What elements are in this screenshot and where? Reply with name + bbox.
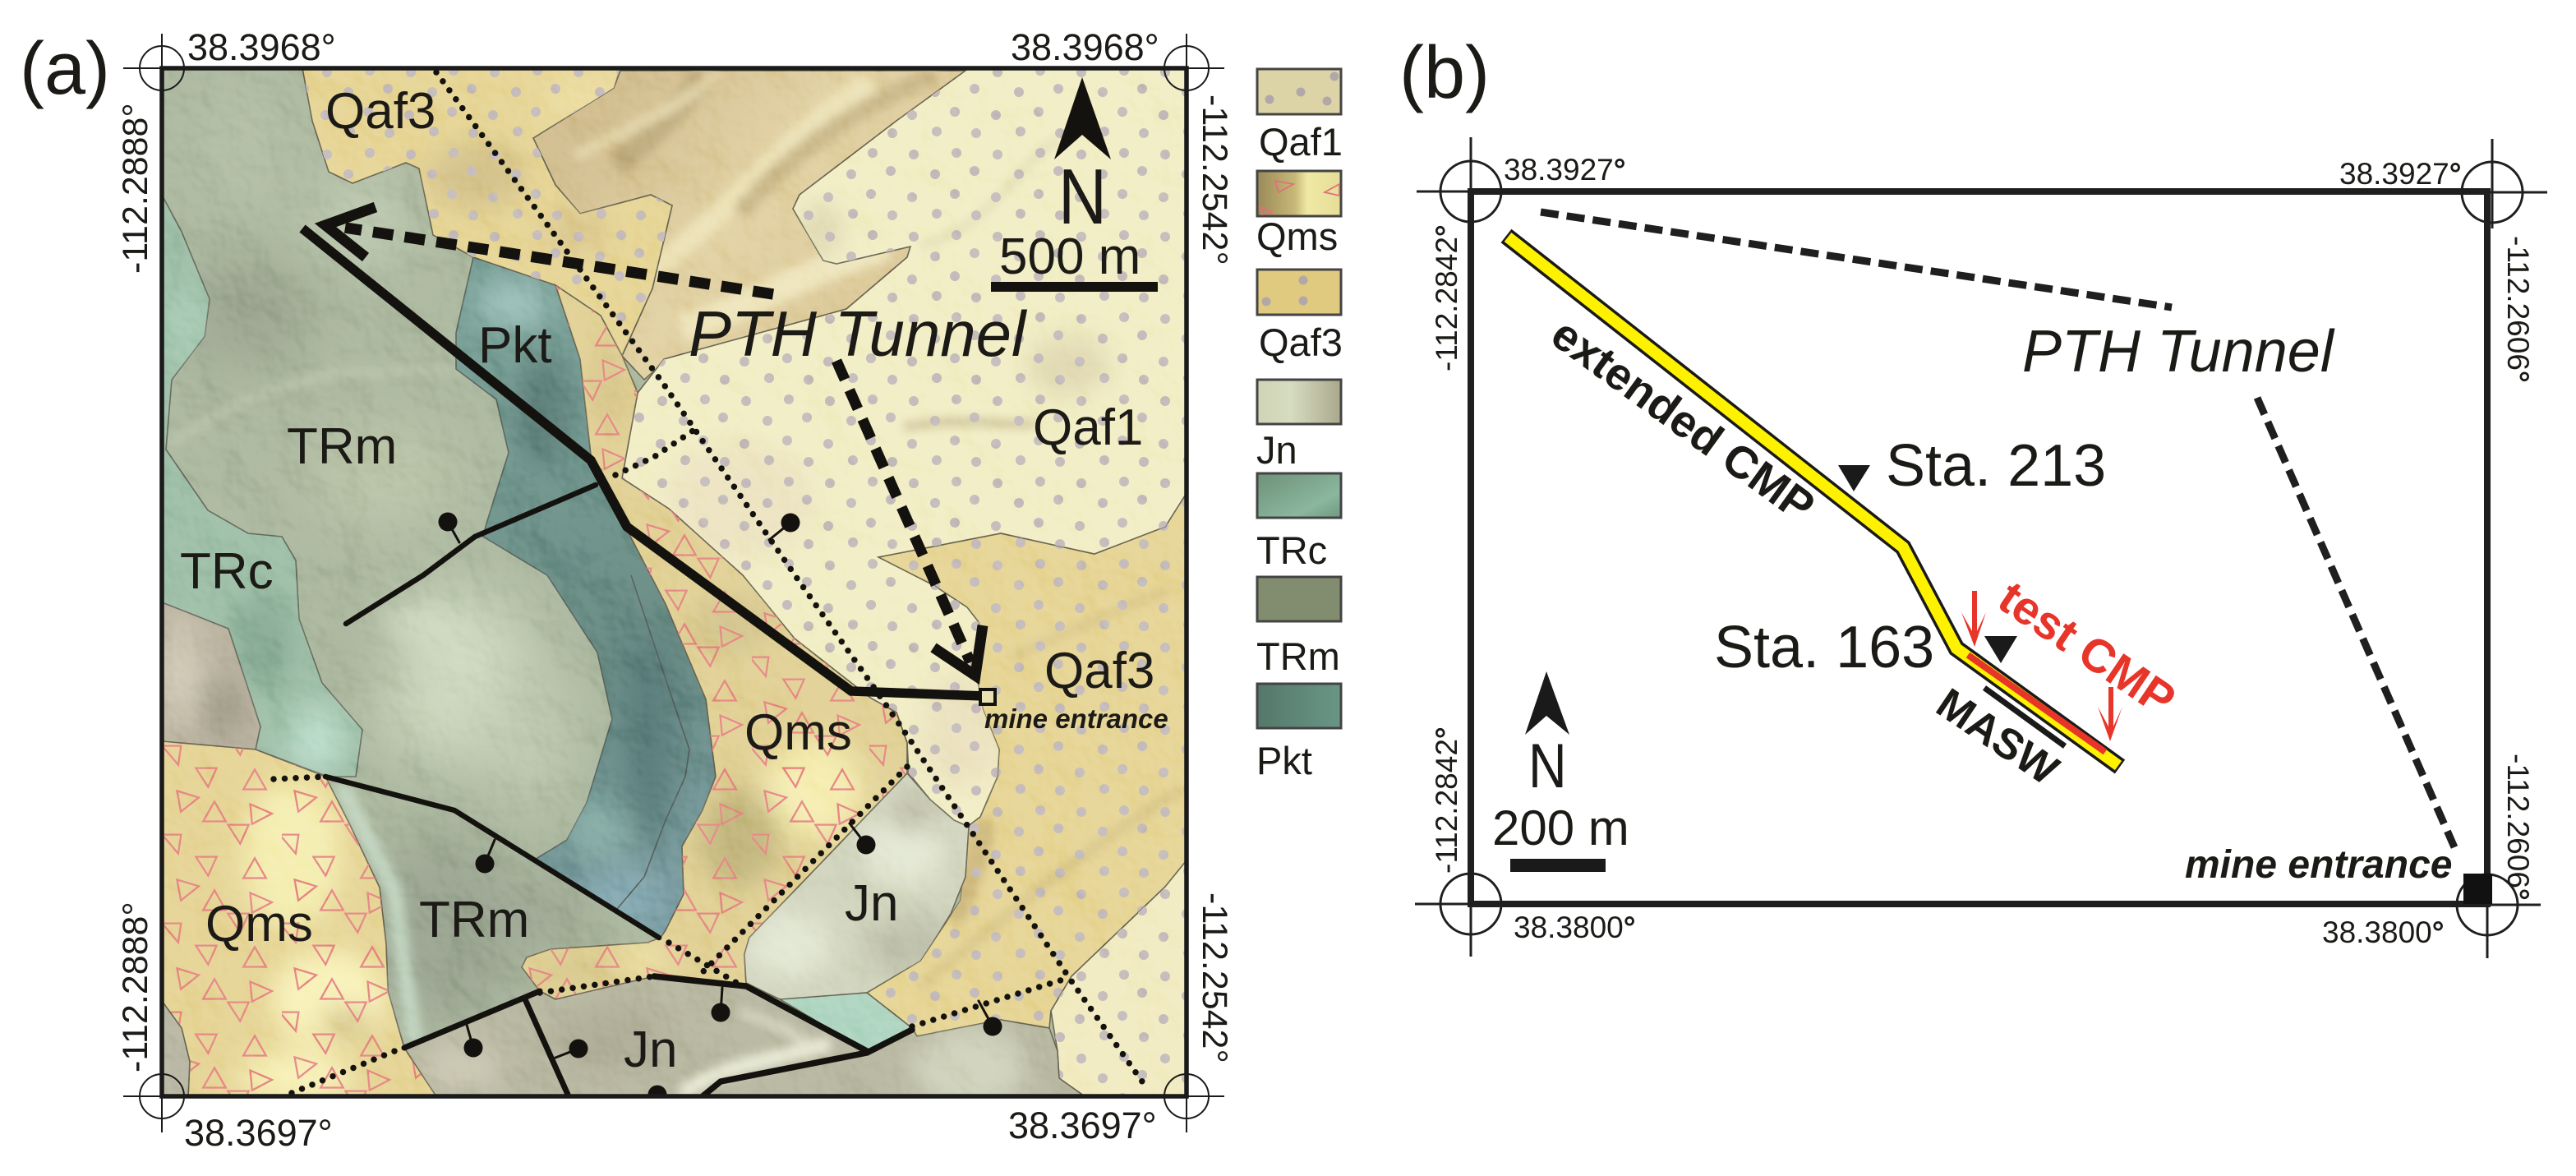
scale bar 200 m: 200 m xyxy=(1492,800,1629,855)
unit: Pkt xyxy=(456,257,716,938)
legend item: Qms: Qms xyxy=(1256,214,1338,258)
unit: TRc south xyxy=(780,993,912,1051)
coordinate labels: 38.3800° xyxy=(2322,915,2445,949)
station marker 163 xyxy=(1984,636,2017,663)
coordinate labels: -112.2606 ° xyxy=(2501,754,2535,901)
PTH Tunnel label: PTH Tunnel xyxy=(2022,319,2335,385)
coordinate labels: -112.2888° xyxy=(116,902,155,1072)
unit: Jn southwest corner xyxy=(162,1001,190,1096)
mine entrance marker xyxy=(2463,874,2492,904)
dashed arrow to tunnel west end xyxy=(325,207,773,294)
map unit labels: Jn xyxy=(845,875,898,932)
station labels: Sta. 213 xyxy=(1886,433,2106,499)
legend item: Qaf3: Qaf3 xyxy=(1259,321,1343,364)
map unit labels: Qaf3 xyxy=(325,83,435,140)
unit: Jn south xyxy=(404,976,1085,1096)
map unit labels: TRc xyxy=(180,543,274,600)
relief texture xyxy=(162,68,1187,1096)
map unit labels: Qaf3 xyxy=(1044,643,1154,699)
map frame xyxy=(162,68,1187,1096)
legend item: Pkt: Pkt xyxy=(1256,739,1312,782)
coordinate labels: -112.2842° xyxy=(1430,224,1463,371)
mine entrance label: mine entrance xyxy=(2185,843,2452,887)
map unit labels: TRm xyxy=(419,892,529,948)
unit: Jn central xyxy=(744,773,969,999)
legend item: Qaf3 xyxy=(1257,270,1343,364)
unit: Jn west xyxy=(162,602,260,749)
unit: Qms southwest xyxy=(162,741,436,1096)
legend item: Qaf1: Qaf1 xyxy=(1259,120,1343,164)
legend item: TRm xyxy=(1256,577,1341,678)
corner registration marks xyxy=(1415,137,2547,958)
panel label (a): (a) xyxy=(20,28,110,110)
legend item: Jn xyxy=(1256,380,1341,472)
north arrow: N xyxy=(1058,152,1107,240)
unit: brown alluvium xyxy=(533,71,969,380)
unit: Qaf3 north xyxy=(302,68,672,356)
map unit labels: Jn xyxy=(624,1022,677,1078)
unit: TRc west xyxy=(162,195,362,777)
legend item: TRm: TRm xyxy=(1256,634,1340,678)
coordinate labels: 38.3697° xyxy=(184,1112,333,1154)
panel: (b) survey layout xyxy=(1399,32,2547,958)
layout frame xyxy=(1471,191,2487,904)
dashed arrow to mine entrance xyxy=(836,361,983,676)
scale bar 500 m: 500 m xyxy=(999,228,1141,285)
coordinate labels xyxy=(116,26,1234,1154)
legend item: TRc: TRc xyxy=(1256,528,1327,572)
coordinate labels: 38.3927° xyxy=(2339,157,2462,191)
coordinate labels: -112.2842° xyxy=(1430,726,1463,874)
map: shaded relief geologic units xyxy=(156,68,1191,1109)
coordinate labels xyxy=(1430,153,2535,949)
coordinate labels: 38.3968° xyxy=(187,26,336,68)
map unit labels: Qaf1 xyxy=(1033,399,1143,456)
unit: Qaf3 southeast xyxy=(867,493,1187,1036)
station labels xyxy=(1714,433,2106,680)
unit: Qaf1 southeast corner xyxy=(1051,860,1187,1096)
MASW bar xyxy=(1984,688,2065,746)
test CMP red segment xyxy=(1968,655,2105,752)
legend item: Pkt xyxy=(1256,684,1341,782)
dashed tunnel line north xyxy=(1541,212,2172,307)
unit: Qaf1 xyxy=(622,68,1187,827)
coordinate labels: 38.3800° xyxy=(1514,911,1636,944)
legend item: Jn: Jn xyxy=(1256,428,1297,472)
coordinate labels: 38.3968° xyxy=(1011,26,1159,68)
unit: Qms central xyxy=(522,285,907,999)
map unit labels: Qms xyxy=(744,704,852,761)
map unit labels: TRm xyxy=(287,418,397,475)
panel: (a) geologic map xyxy=(20,26,1343,1154)
map unit labels xyxy=(180,83,1154,1078)
panel: (b) survey layout: test CMP xyxy=(1989,571,2185,726)
north arrow xyxy=(1054,77,1111,240)
mine entrance label: mine entrance xyxy=(984,703,1168,734)
legend item: Qms xyxy=(1256,171,1341,258)
thin contact inside Pkt xyxy=(617,575,689,909)
coordinate labels: 38.3697° xyxy=(1008,1105,1157,1146)
tunnel line solid xyxy=(302,228,984,696)
unit: TRm base xyxy=(164,71,1056,1045)
coordinate labels: -112.2606 ° xyxy=(2501,236,2535,383)
station labels: Sta. 163 xyxy=(1714,615,1934,680)
solid faults with ball ticks xyxy=(325,485,993,1096)
line labels: extended CMP xyxy=(1542,308,1824,532)
legend item: TRc xyxy=(1256,473,1341,572)
panel: (b) survey layout: MASW xyxy=(1928,680,2067,796)
coordinate labels: -112.2542° xyxy=(1195,892,1234,1063)
coordinate labels: -112.2542° xyxy=(1195,95,1234,265)
extended CMP line xyxy=(1506,236,2120,767)
station marker 213 xyxy=(1838,465,1870,491)
north arrow: N xyxy=(1528,731,1567,800)
dashed tunnel line east xyxy=(2257,398,2454,847)
legend xyxy=(1256,69,1343,782)
map unit labels: Qms xyxy=(205,896,313,952)
mine entrance marker xyxy=(980,689,995,704)
coordinate labels: 38.3927° xyxy=(1504,153,1626,187)
legend item: Qaf1 xyxy=(1257,69,1343,164)
panel label (b): (b) xyxy=(1399,32,1490,114)
corner registration marks xyxy=(123,34,1224,1132)
dotted inferred faults xyxy=(274,72,1148,1093)
map unit labels: Pkt xyxy=(478,317,552,374)
north arrow xyxy=(1525,671,1569,800)
PTH Tunnel label: PTH Tunnel xyxy=(689,297,1028,370)
red arrows marking test CMP ends xyxy=(1961,591,2122,741)
coordinate labels: -112.2888° xyxy=(116,103,155,274)
